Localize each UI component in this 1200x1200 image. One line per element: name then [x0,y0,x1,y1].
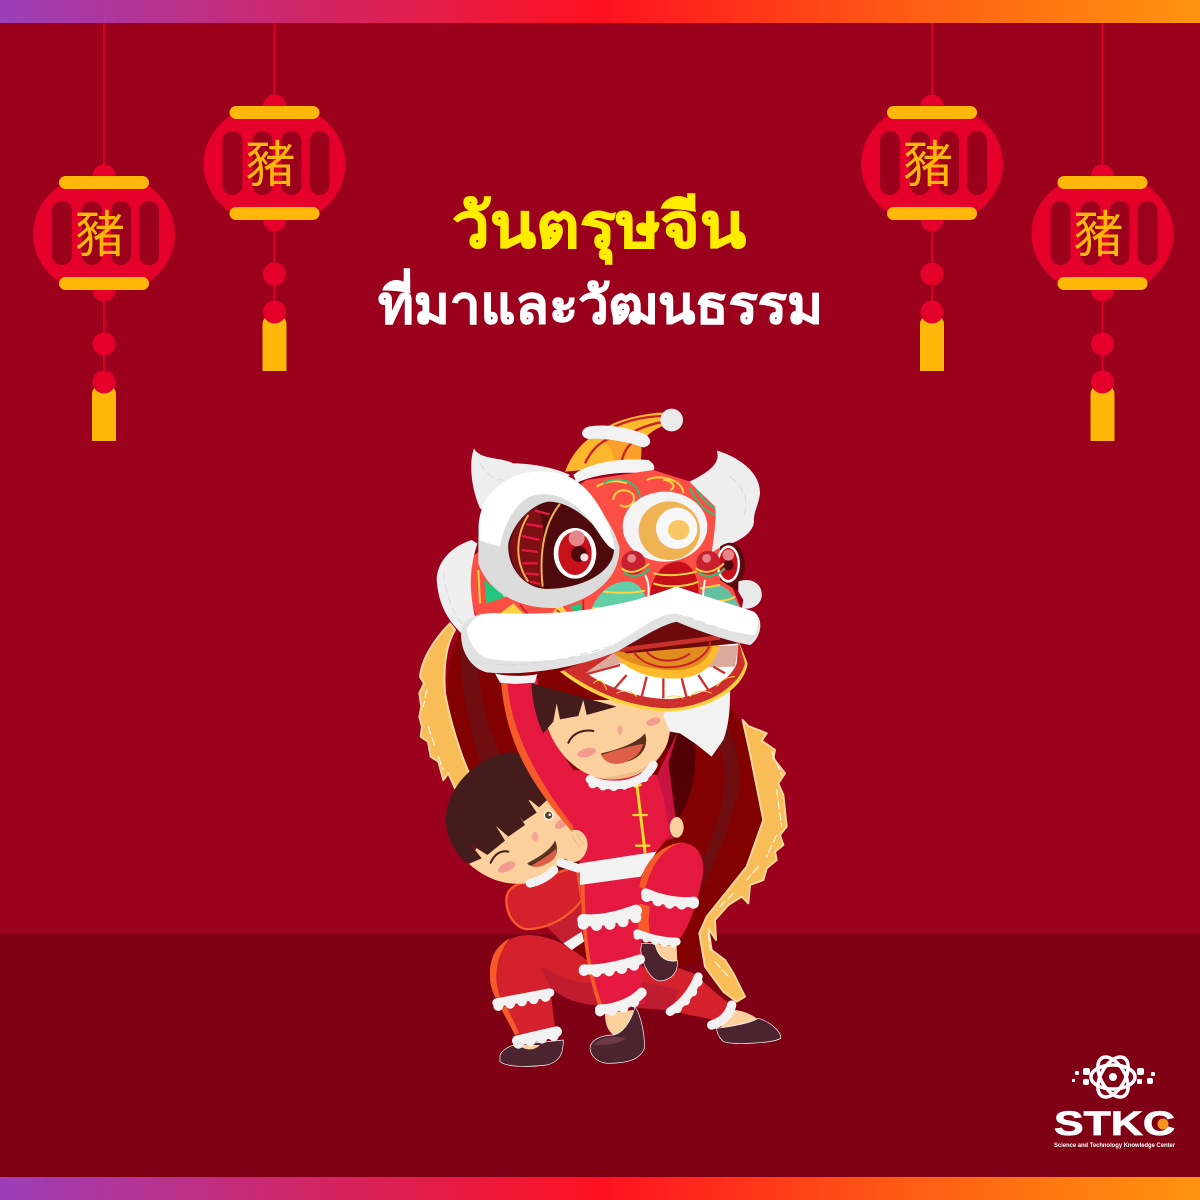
lion forehead ornament [623,492,707,562]
lower child hand and wrist lace [561,830,588,868]
lower child jacket arm [506,867,582,929]
lantern inner left: 豬 [246,137,296,193]
upper child pants [580,873,645,1012]
upper child standing foot [590,1007,644,1063]
lion cape [419,623,787,1002]
lantern far left: 豬 [75,207,125,263]
gold fringe right [699,720,787,1002]
title line 1: วันตรุษจีน [452,192,746,264]
fringe wisps [423,690,782,978]
upper child sash [579,852,657,885]
lion cheeks and nose [587,551,744,623]
lantern far right [1032,23,1174,441]
lion left ear [471,448,570,517]
lion face base [470,470,743,623]
upper child [501,678,703,1063]
lower child [446,752,781,1066]
lower child shoes [500,1010,781,1066]
lion left eye [478,478,619,608]
STKC logo [1054,1052,1175,1149]
lion brow [479,472,615,550]
lion left cheek fur [437,540,477,637]
upper child head [532,683,670,787]
upper child raised foot [641,943,677,981]
lantern far right: 豬 [1074,207,1124,263]
bottom gradient bar [0,1177,1200,1200]
logo wordmark: STKC [1054,1105,1175,1143]
lion upper lip [463,588,759,672]
lion curl [738,580,762,609]
title [378,192,823,335]
lion right eye [717,543,745,592]
lower child back leg and body [490,900,728,1035]
lion dance illustration [419,409,787,1066]
lion beard [663,683,730,757]
upper child raised leg [638,843,703,942]
upper child arm and torso [501,678,684,867]
logo orange dot [1158,1118,1168,1130]
lantern far left [33,23,175,441]
lantern inner left [204,23,346,371]
logo atom icon [1091,1052,1135,1102]
lantern inner right [861,23,1003,371]
floor band [0,934,1200,1177]
gold fringe left [419,623,470,788]
title line 2: ที่มาและวัฒนธรรม [378,269,823,335]
lion face pattern [478,477,715,622]
lower child cuffs lace [497,977,732,1043]
lion mouth [560,618,748,712]
lion head [437,409,762,757]
logo dots [1072,1068,1155,1085]
logo tagline: Science and Technology Knowledge Center [1054,1142,1175,1149]
lower child head [446,752,578,884]
upper child frog buttons [633,783,649,852]
upper child lace trim [583,893,694,1012]
top gradient bar [0,0,1200,23]
lion fur marks [443,463,752,665]
lantern inner right: 豬 [903,137,953,193]
lion hat [565,409,683,483]
arm cuff [495,673,537,684]
lion right ear [689,451,760,553]
